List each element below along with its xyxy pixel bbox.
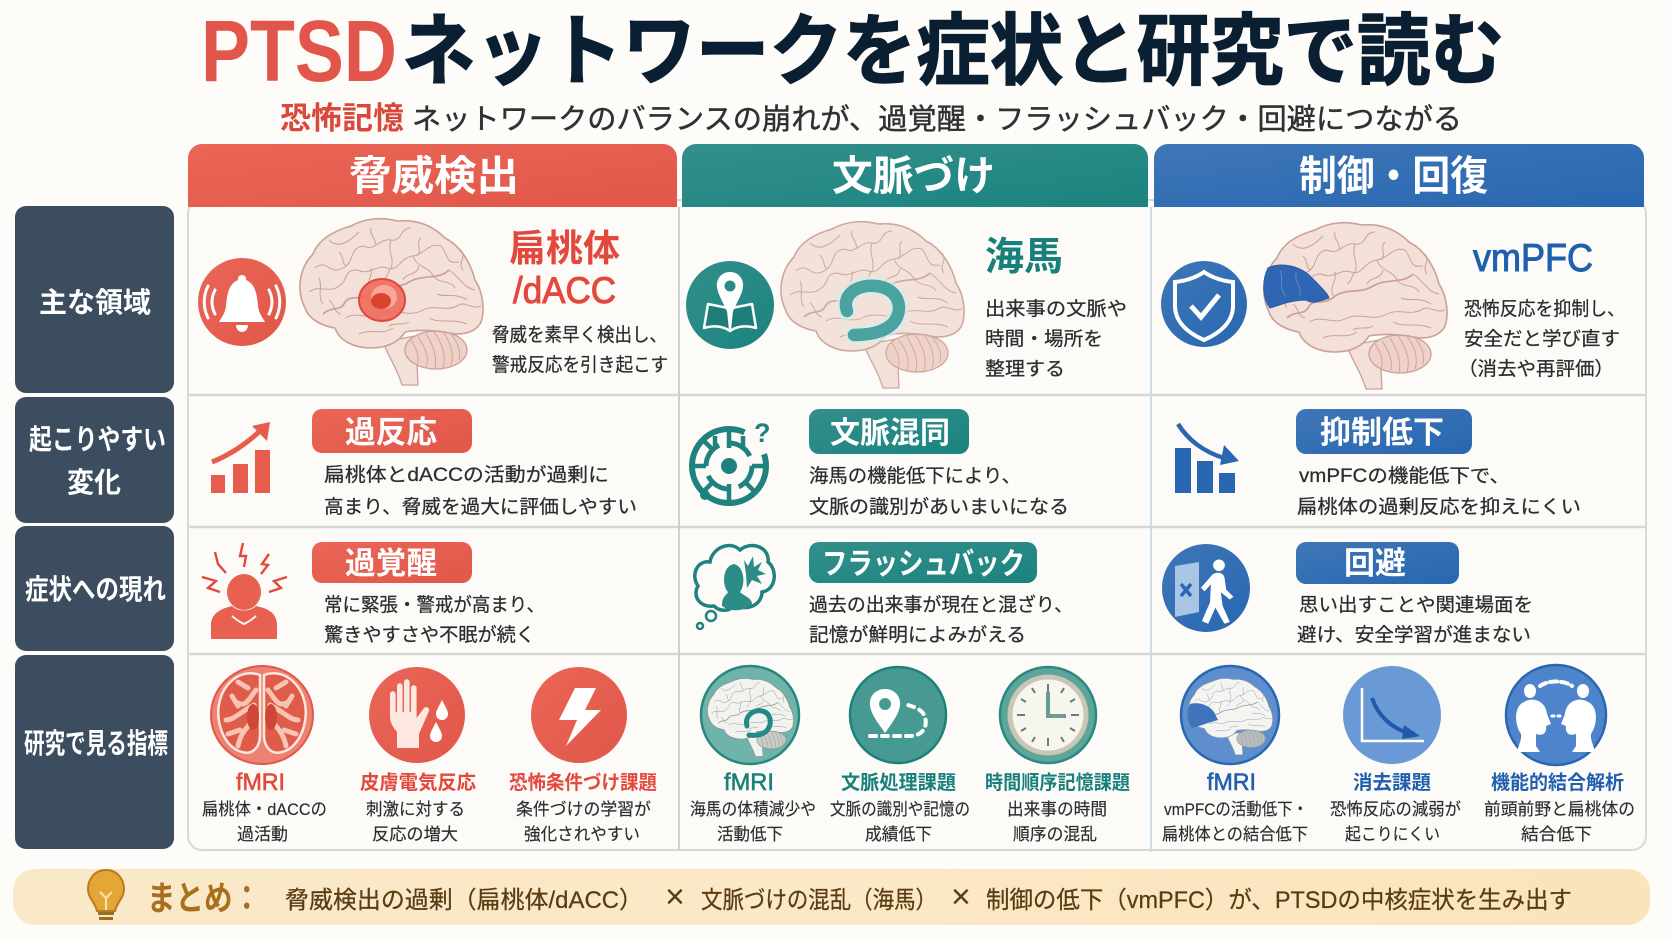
icon: extinction curve bbox=[1343, 666, 1441, 764]
description: 整理する bbox=[985, 358, 1065, 380]
row label: likely changes: 起こりやすい bbox=[29, 424, 166, 455]
description: 安全だと学び直す bbox=[1464, 328, 1620, 350]
label bbox=[1330, 772, 1461, 844]
panel: flashback bbox=[695, 542, 1073, 646]
panel: vmPFC region bbox=[1161, 223, 1625, 389]
label: 起こりにくい bbox=[1345, 825, 1440, 844]
tag: 抑制低下 bbox=[1320, 415, 1444, 450]
description: 過去の出来事が現在と混ざり、 bbox=[809, 593, 1073, 616]
tag bbox=[809, 409, 969, 454]
label: 刺激に対する bbox=[366, 800, 465, 819]
icon: falling bar chart bbox=[1175, 424, 1239, 493]
column header: contextualization: 文脈づけ bbox=[832, 153, 995, 199]
label: 皮膚電気反応 bbox=[360, 772, 476, 794]
brain with hippocampus highlighted bbox=[781, 222, 964, 388]
row label: research indicators bbox=[15, 655, 174, 849]
tag bbox=[1296, 409, 1472, 454]
row label: research indicators: 研究で見る指標 bbox=[24, 728, 168, 759]
label: 海馬の体積減少や bbox=[690, 800, 816, 819]
description: 恐怖反応を抑制し、 bbox=[1464, 298, 1625, 320]
label: 扁桃体・dACCの bbox=[202, 800, 327, 819]
tag bbox=[312, 542, 472, 583]
description: 出来事の文脈や bbox=[985, 298, 1127, 320]
subtitle: 恐怖記憶 bbox=[280, 101, 404, 136]
summary heading: まとめ： bbox=[147, 880, 261, 918]
column header: contextualization bbox=[682, 144, 1148, 207]
row label: symptoms bbox=[15, 526, 174, 651]
description: （消去や再評価） bbox=[1458, 358, 1614, 380]
row label: main regions bbox=[15, 206, 174, 393]
label: 条件づけの学習が bbox=[516, 800, 651, 819]
title: PTSD bbox=[201, 3, 397, 100]
description: 高まり、脅威を過大に評価しやすい bbox=[324, 496, 637, 518]
description: 避け、安全学習が進まない bbox=[1297, 624, 1531, 646]
icon: light bulb bbox=[88, 870, 124, 920]
panel: context confusion bbox=[692, 409, 1069, 518]
row label: likely changes bbox=[15, 397, 174, 523]
table body panel bbox=[188, 200, 1646, 850]
icon: maze with question mark bbox=[692, 418, 770, 503]
description: 警戒反応を引き起こす bbox=[492, 354, 668, 376]
description bbox=[809, 593, 1073, 646]
label: 反応の増大 bbox=[372, 825, 458, 844]
indicator: red fMRI bbox=[202, 666, 327, 844]
title: ネットワークを症状と研究で読む bbox=[402, 7, 1504, 95]
icon: map pin on book bbox=[686, 261, 774, 349]
summary text bbox=[285, 878, 1572, 916]
tag bbox=[1296, 542, 1459, 584]
icon: person leaving door bbox=[1162, 544, 1250, 632]
label bbox=[690, 769, 816, 844]
icon: clock bbox=[1000, 667, 1096, 763]
indicator: context processing task bbox=[830, 667, 970, 844]
label: 過活動 bbox=[237, 825, 288, 844]
summary text: 脅威検出の過剰（扁桃体/dACC） bbox=[285, 887, 643, 914]
tag: 文脈混同 bbox=[830, 417, 950, 450]
icon: axial brain scan bbox=[211, 666, 313, 764]
label: fMRI bbox=[724, 769, 774, 796]
icon: two facing heads bbox=[1506, 665, 1606, 765]
icon: brain scan with vmPFC bbox=[1181, 666, 1279, 764]
panel: amygdala region bbox=[198, 219, 668, 385]
description: 文脈の識別があいまいになる bbox=[809, 496, 1069, 518]
summary text: × bbox=[665, 878, 685, 916]
subtitle: ネットワークのバランスの崩れが、過覚醒・フラッシュバック・回避につながる bbox=[412, 103, 1462, 136]
description: 驚きやすさや不眠が続く bbox=[324, 624, 535, 646]
panel: avoidance bbox=[1162, 542, 1533, 646]
label: 順序の混乱 bbox=[1013, 825, 1097, 844]
label bbox=[1484, 772, 1635, 844]
icon: hand with sweat drops bbox=[369, 667, 465, 763]
column header: control and recovery bbox=[1154, 144, 1644, 207]
description bbox=[324, 464, 637, 518]
label: 消去課題 bbox=[1353, 772, 1431, 794]
indicator: teal fMRI bbox=[690, 666, 816, 844]
description: 扁桃体とdACCの活動が過剰に bbox=[324, 464, 609, 486]
description bbox=[809, 465, 1069, 518]
row label: likely changes: 変化 bbox=[67, 467, 121, 498]
indicator: blue fMRI bbox=[1162, 666, 1308, 844]
description bbox=[324, 594, 545, 646]
description bbox=[985, 298, 1127, 380]
tag: 過覚醒 bbox=[345, 546, 437, 581]
icon: maze with question mark: ? bbox=[754, 418, 770, 448]
description: 記憶が鮮明によみがえる bbox=[809, 624, 1026, 646]
indicator: extinction task bbox=[1330, 666, 1461, 844]
panel: hyperarousal bbox=[202, 542, 545, 646]
panel: reduced inhibition bbox=[1175, 409, 1581, 518]
label: 扁桃体との結合低下 bbox=[1162, 825, 1308, 844]
icon: pin with dashed route bbox=[850, 667, 946, 763]
label: 機能的結合解析 bbox=[1491, 772, 1624, 794]
tag bbox=[312, 409, 472, 453]
description bbox=[1297, 594, 1533, 646]
brain with vmPFC highlighted bbox=[1264, 223, 1447, 389]
indicator: skin conductance bbox=[360, 667, 476, 844]
label: 恐怖条件づけ課題 bbox=[509, 771, 657, 794]
column header: threat detection bbox=[188, 144, 677, 207]
summary text: 制御の低下（vmPFC）が、PTSDの中核症状を生み出す bbox=[986, 887, 1572, 914]
region name: 扁桃体 bbox=[509, 228, 620, 269]
label bbox=[202, 769, 327, 844]
brain with amygdala highlighted bbox=[300, 219, 483, 385]
label bbox=[1162, 769, 1308, 844]
description: 脅威を素早く検出し、 bbox=[492, 324, 667, 346]
label bbox=[830, 772, 970, 844]
tag: 過反応 bbox=[345, 415, 437, 450]
tag: 回避 bbox=[1344, 546, 1406, 581]
label: 活動低下 bbox=[717, 825, 783, 844]
description: 常に緊張・警戒が高まり、 bbox=[324, 594, 545, 616]
label: 成績低下 bbox=[865, 825, 932, 844]
label: fMRI bbox=[1207, 769, 1256, 796]
icon: shield with check bbox=[1161, 261, 1247, 347]
tag: フラッシュバック bbox=[822, 548, 1025, 581]
icon: thought cloud with head bbox=[695, 546, 774, 629]
indicator: fear conditioning bbox=[509, 667, 657, 844]
region name: 海馬 bbox=[985, 236, 1063, 279]
label: 恐怖反応の減弱が bbox=[1330, 800, 1461, 819]
label: 前頭前野と扁桃体の bbox=[1484, 800, 1635, 819]
label: 文脈処理課題 bbox=[841, 772, 956, 794]
summary text: × bbox=[951, 878, 971, 916]
label: 出来事の時間 bbox=[1007, 800, 1107, 819]
icon: lightning bolt bbox=[531, 667, 627, 763]
row label: main regions: 主な領域 bbox=[39, 287, 151, 318]
column header: threat detection: 脅威検出 bbox=[349, 153, 519, 199]
description bbox=[1458, 298, 1625, 380]
callout: summary bar bbox=[13, 869, 1650, 925]
label: 文脈の識別や記憶の bbox=[830, 800, 970, 819]
description: vmPFCの機能低下で、 bbox=[1299, 465, 1510, 487]
region name: vmPFC bbox=[1473, 237, 1593, 280]
label: 結合低下 bbox=[1521, 825, 1592, 844]
label bbox=[360, 772, 476, 844]
description: 扁桃体の過剰反応を抑えにくい bbox=[1297, 496, 1581, 518]
panel: hippocampus region bbox=[686, 222, 1127, 388]
description bbox=[1297, 465, 1581, 518]
label bbox=[509, 771, 657, 844]
indicator: temporal order memory task bbox=[985, 667, 1130, 844]
label: fMRI bbox=[236, 769, 285, 796]
tag bbox=[809, 542, 1037, 583]
label: vmPFCの活動低下・ bbox=[1164, 800, 1308, 819]
label bbox=[985, 772, 1130, 844]
description: 海馬の機能低下により、 bbox=[809, 465, 1021, 487]
icon: brain scan with hippocampus bbox=[701, 666, 799, 764]
summary text: 文脈づけの混乱（海馬） bbox=[701, 887, 937, 914]
indicator: functional connectivity analysis bbox=[1484, 665, 1635, 844]
column header: control and recovery: 制御・回復 bbox=[1299, 153, 1488, 199]
description: 時間・場所を bbox=[985, 328, 1103, 350]
region name: /dACC bbox=[513, 270, 616, 311]
panel: hyperreactivity bbox=[211, 409, 637, 518]
region name bbox=[509, 228, 620, 311]
label: 時間順序記憶課題 bbox=[985, 772, 1130, 794]
label: 強化されやすい bbox=[524, 825, 640, 844]
row label: symptoms: 症状への現れ bbox=[25, 574, 166, 605]
description bbox=[492, 324, 668, 376]
icon: rising bar chart bbox=[211, 422, 270, 493]
description: 思い出すことや関連場面を bbox=[1299, 594, 1533, 616]
icon: alarm bell bbox=[198, 258, 286, 346]
icon: stressed person bbox=[202, 543, 287, 639]
